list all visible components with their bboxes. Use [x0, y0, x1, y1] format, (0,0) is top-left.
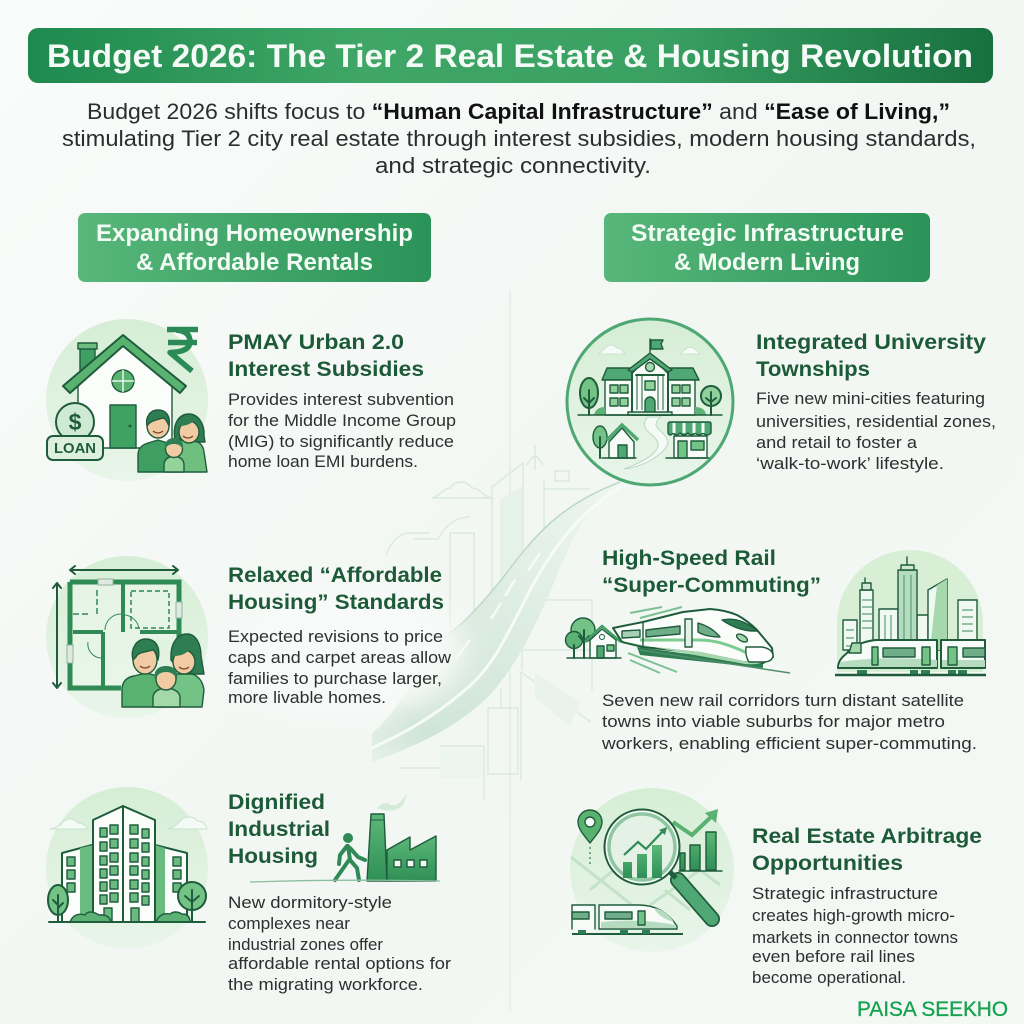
text block: university townships	[756, 330, 996, 473]
text block: rail body	[601, 692, 977, 753]
intro text: Budget 2026 shifts focus to “Human Capital Infrastructure” and “Ease of Living,”	[87, 99, 950, 124]
soft glow behind left text	[225, 582, 465, 718]
text block: PMAY: PMAY Urban 2.0	[228, 330, 404, 354]
text block: industrial housing heading: Dignified	[228, 790, 325, 814]
rupee symbol	[167, 330, 198, 371]
text block: industrial housing body: New dormitory-style	[228, 894, 392, 912]
text block: rail heading	[602, 546, 821, 597]
column header: homeownership	[78, 213, 431, 282]
text block: arbitrage: even before rail lines	[752, 948, 915, 966]
text block: university townships: Townships	[756, 357, 870, 381]
text block: industrial housing body	[228, 894, 452, 994]
text block: affordable housing standards: Relaxed “Affordable	[228, 563, 442, 587]
text block: arbitrage: Opportunities	[752, 851, 903, 875]
column header: homeownership: & Affordable Rentals	[136, 249, 373, 276]
text block: industrial housing heading: Industrial	[228, 817, 330, 841]
text block: rail heading: “Super-Commuting”	[602, 573, 821, 597]
text block: rail body: towns into viable suburbs for major metro	[602, 713, 945, 731]
text block: university townships: and retail to foster a	[756, 434, 918, 452]
text block: university townships: ‘walk-to-work’ lifestyle.	[756, 455, 944, 473]
intro text: stimulating Tier 2 city real estate through interest subsidies, modern housing standards,	[62, 126, 976, 151]
title banner	[28, 28, 993, 83]
text block: affordable housing standards: caps and carpet areas allow	[228, 649, 451, 667]
intro text: and strategic connectivity.	[375, 153, 651, 178]
column header: infrastructure: Strategic Infrastructure	[631, 220, 904, 247]
road	[372, 482, 620, 762]
background: faint city skyline and road	[225, 290, 625, 1010]
text block: arbitrage: creates high-growth micro-	[752, 907, 955, 925]
text block: affordable housing standards: more livable homes.	[228, 689, 386, 707]
text block: arbitrage: become operational.	[752, 969, 906, 987]
text block: affordable housing standards: families to purchase larger,	[228, 670, 442, 688]
text block: affordable housing standards: Housing” Standards	[228, 590, 444, 614]
icon: walker and factory	[250, 793, 440, 882]
icon: skyline and metro train	[835, 550, 986, 675]
icon: magnifier over growth chart and map	[570, 788, 734, 952]
text block: rail body: workers, enabling efficient super-commuting.	[601, 735, 977, 753]
text block: PMAY: for the Middle Income Group	[228, 412, 456, 430]
text block: PMAY: home loan EMI burdens.	[228, 453, 418, 471]
text block: industrial housing body: the migrating workforce.	[228, 976, 423, 994]
brand wordmark: PAISA SEEKHO	[857, 997, 1008, 1021]
text block: arbitrage: Strategic infrastructure	[752, 885, 938, 903]
icon: apartment towers	[46, 787, 208, 949]
text block: PMAY: Provides interest subvention	[228, 391, 454, 409]
text block: university townships: Integrated University	[756, 330, 986, 354]
text block: arbitrage: Real Estate Arbitrage	[752, 824, 982, 848]
text block: rail body: Seven new rail corridors turn distant satellite	[602, 692, 964, 710]
text block: university townships: universities, residential zones,	[756, 413, 996, 431]
title banner: Budget 2026: The Tier 2 Real Estate & Housing Revolution	[47, 38, 973, 74]
icon: house loan with family: $	[69, 409, 82, 435]
icon: university township	[567, 319, 733, 485]
text block: affordable housing standards	[228, 563, 451, 707]
icon: house loan with family	[46, 319, 208, 481]
column header: homeownership: Expanding Homeownership	[96, 220, 413, 247]
text block: industrial housing body: affordable rental options for	[228, 955, 452, 973]
text block: rail heading: High-Speed Rail	[602, 546, 776, 570]
column header: infrastructure	[604, 213, 930, 282]
text block: industrial housing body: industrial zones offer	[228, 936, 384, 954]
text block: arbitrage	[752, 824, 982, 987]
text block: PMAY: Interest Subsidies	[228, 357, 424, 381]
text block: industrial housing body: complexes near	[228, 915, 351, 933]
text block: university townships: Five new mini-cities featuring	[756, 390, 985, 408]
text block: industrial housing heading	[228, 790, 330, 868]
text block: PMAY: (MIG) to significantly reduce	[228, 433, 454, 451]
text block: affordable housing standards: Expected revisions to price	[228, 628, 443, 646]
icon: house loan with family: LOAN	[54, 440, 96, 457]
intro text	[62, 99, 976, 178]
icon: floor plan with family	[46, 556, 208, 718]
icon: commuter house and bullet train	[566, 607, 790, 673]
text block: industrial housing heading: Housing	[228, 844, 318, 868]
column header: infrastructure: & Modern Living	[674, 249, 860, 276]
text block: arbitrage: markets in connector towns	[752, 929, 958, 947]
text block: PMAY	[228, 330, 456, 471]
